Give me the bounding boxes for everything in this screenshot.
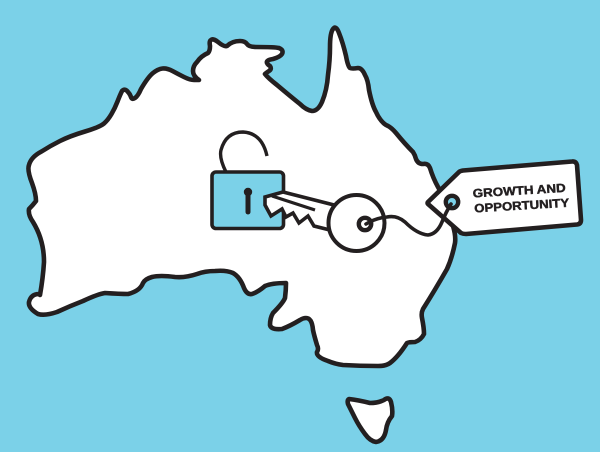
tag text: OPPORTUNITY — [474, 196, 570, 215]
tag outline — [428, 161, 581, 234]
key head — [328, 195, 384, 251]
icon: open padlock — [212, 132, 284, 228]
map: Australia mainland — [28, 28, 455, 366]
key blade groove — [272, 196, 315, 210]
padlock shackle — [221, 132, 267, 172]
key ring hole — [359, 218, 371, 230]
icon: key — [265, 192, 384, 251]
tag text — [472, 181, 570, 215]
padlock keyhole — [244, 188, 252, 212]
tag hole — [446, 196, 458, 208]
map: Tasmania — [348, 398, 392, 442]
padlock body — [212, 172, 284, 228]
tag: growth and opportunity — [428, 161, 581, 234]
key blade — [265, 192, 334, 230]
string from key to tag — [366, 204, 451, 235]
tag text: GROWTH AND — [472, 181, 566, 200]
